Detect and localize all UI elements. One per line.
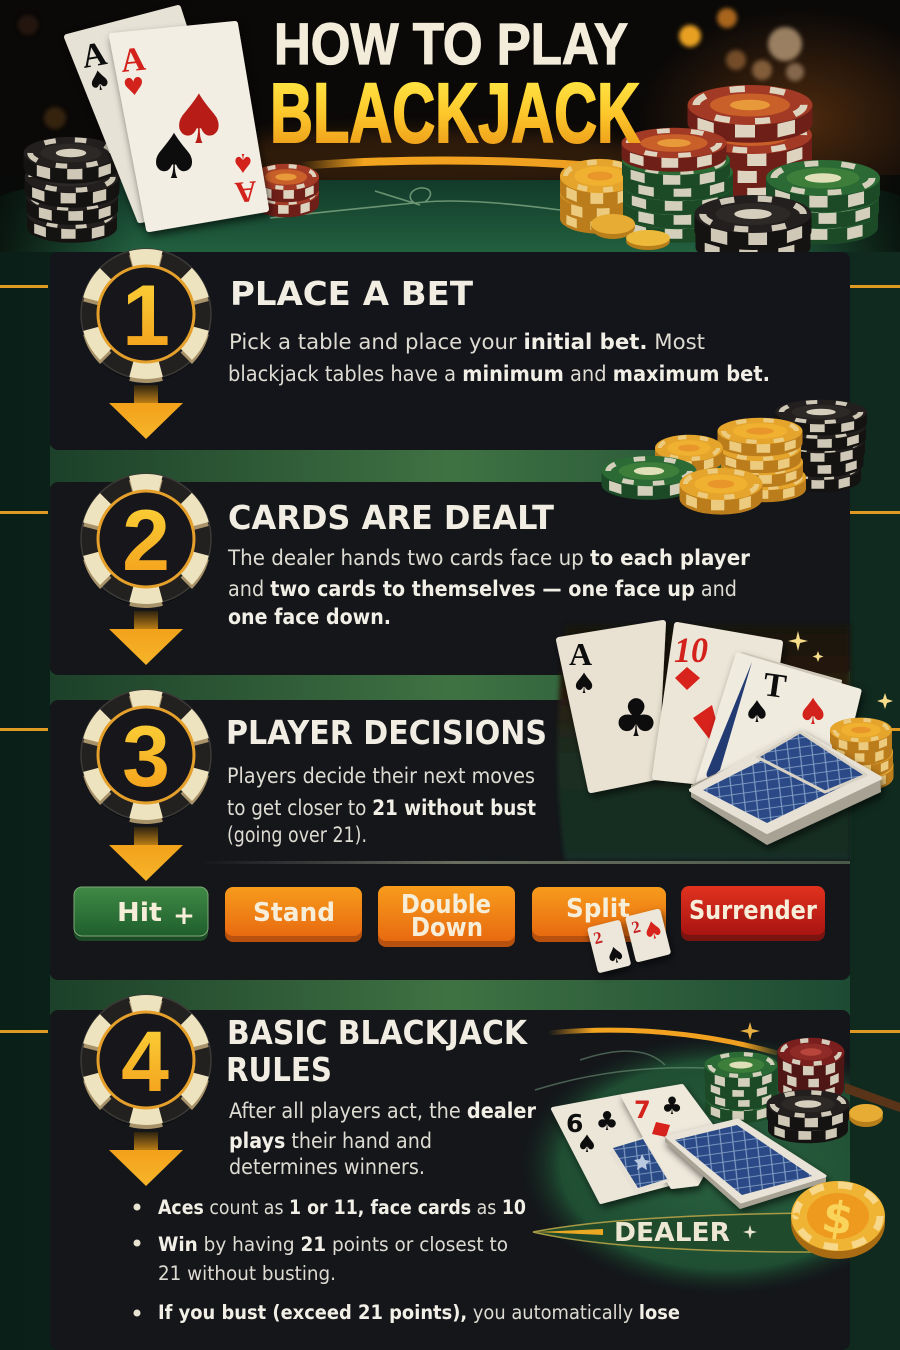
table rail [845,1083,900,1112]
sparkles [788,631,893,709]
step 2 text [227,546,751,629]
step 4 text: After all players act, the dealer [229,1099,537,1123]
front ace card [112,24,266,229]
button: surrender [681,886,825,941]
scene: dealt cards background [200,625,850,864]
header playing cards [67,8,266,229]
step 4 chip badge [81,995,211,1127]
T of spades card: ♠ [797,692,829,733]
step 1 text: Pick a table and place your initial bet. Most [229,330,705,354]
ace of clubs card: ♠ [571,667,597,700]
front ace card: ♠ [146,120,202,193]
step 2 text: one face down. [228,605,391,629]
step 4 chip badge: 4 [121,1014,169,1110]
header scene [0,0,900,252]
card behind T [720,652,842,780]
ace of clubs card: ♣ [613,689,659,749]
T of spades card: T [761,666,789,706]
small face-down card [609,1137,670,1195]
scene: dealt cards [559,623,894,845]
dealer banner: DEALER [614,1218,730,1248]
dollar coin [791,1181,885,1259]
rules list: Aces count as 1 or 11, face cards as 10 [158,1196,526,1219]
panel: step 3 [50,690,850,980]
six of clubs card [553,1096,673,1202]
step 4 heading: RULES [226,1050,332,1089]
step 3 heading: PLAYER DECISIONS [226,713,547,752]
step 3 arrow [109,827,183,881]
button: double down [378,886,515,947]
front ace card: ♠ [231,147,255,177]
rules list: If you bust (exceed 21 points), you automatically lose [158,1301,680,1324]
gold coin stack [830,718,894,790]
button: double down: Down [411,913,483,943]
chips between step 1 and 2 [602,400,867,515]
step 3 chip badge: 3 [122,709,170,805]
step 2 heading: CARDS ARE DEALT [228,498,554,537]
step 3 text: Players decide their next moves [227,764,535,788]
step 1 arrow [109,385,183,439]
split cards [587,908,671,973]
split cards: ♠ [639,914,667,947]
step 3 text: to get closer to 21 without bust [227,796,536,820]
split cards: 2 [592,928,604,948]
ace of clubs card: A [569,636,592,672]
back ace card [67,8,240,220]
title [270,12,640,160]
title: HOW TO PLAY [274,12,628,77]
scene: dealer table [533,1038,900,1259]
ten of diamonds card: 10 [674,630,708,670]
front ace card: ♠ [169,81,229,160]
step 2 text: and two cards to themselves — one face up and [228,577,737,601]
ace of clubs card [559,623,663,790]
back ace card: A [79,35,110,76]
button: stand: Stand [253,898,335,928]
front ace card: ♥ [122,72,146,102]
panel: step 1 [50,249,850,450]
step 3 text: (going over 21). [227,823,367,847]
button: split: Split [566,894,630,924]
step 1 text: blackjack tables have a minimum and maximum bet. [228,362,770,386]
card deck [691,732,881,845]
card deck [665,1120,826,1209]
front ace card: A [119,41,148,80]
button: double down: Double [401,890,491,920]
felt background [532,1022,850,1288]
step 4 text [229,1099,537,1179]
button: stand [225,887,362,942]
step 4 text: plays their hand and [229,1129,432,1153]
step 2 text: The dealer hands two cards face up to each player [227,546,751,570]
step 2 chip badge [81,474,211,606]
header left chip stacks [23,137,319,243]
T of spades card: ♠ [744,695,770,730]
T of spades card [698,655,859,798]
step 2 chip badge: 2 [122,493,170,589]
seven card [623,1086,722,1187]
dollar coin: $ [818,1191,857,1246]
rules list [134,1196,680,1324]
rules list: Win by having 21 points or closest to [158,1233,508,1256]
step 3 text [227,764,536,847]
step 4 heading: BASIC BLACKJACK [227,1013,528,1052]
rules list: 21 without busting. [158,1262,336,1285]
button: split [532,887,671,973]
step 4 arrow [109,1132,183,1186]
split cards: 2 [630,917,642,937]
panel: step 4 [50,995,900,1350]
chip stacks [704,1038,883,1143]
title: BLACKJACK [270,66,640,160]
six of clubs card: 6 [566,1109,583,1138]
dealer banner [533,1213,815,1252]
six of clubs card: ♠ [576,1130,598,1158]
button: hit: Hit [117,898,162,928]
seven card: ♣ [661,1092,683,1120]
front ace card: A [233,174,258,209]
step 2 arrow [109,611,183,665]
button: hit [74,887,208,941]
step 1 chip badge [81,249,211,381]
action buttons [74,886,825,973]
button: hit: + [173,901,195,931]
panel: step 2 [50,474,850,675]
step 4 text: determines winners. [229,1155,425,1179]
split cards: ♠ [603,942,628,971]
button: surrender: Surrender [689,896,817,926]
step 1 chip badge: 1 [122,268,170,364]
header right chip stacks [560,85,880,264]
step 3 chip badge [81,690,211,822]
ten of diamonds card [655,625,780,788]
back ace card: ♠ [85,64,114,99]
seven card: 7 [634,1096,651,1124]
step 4 heading [226,1013,528,1089]
step 1 text [228,330,770,386]
step 1 heading: PLACE A BET [230,274,473,313]
six of clubs card: ♣ [595,1107,619,1137]
